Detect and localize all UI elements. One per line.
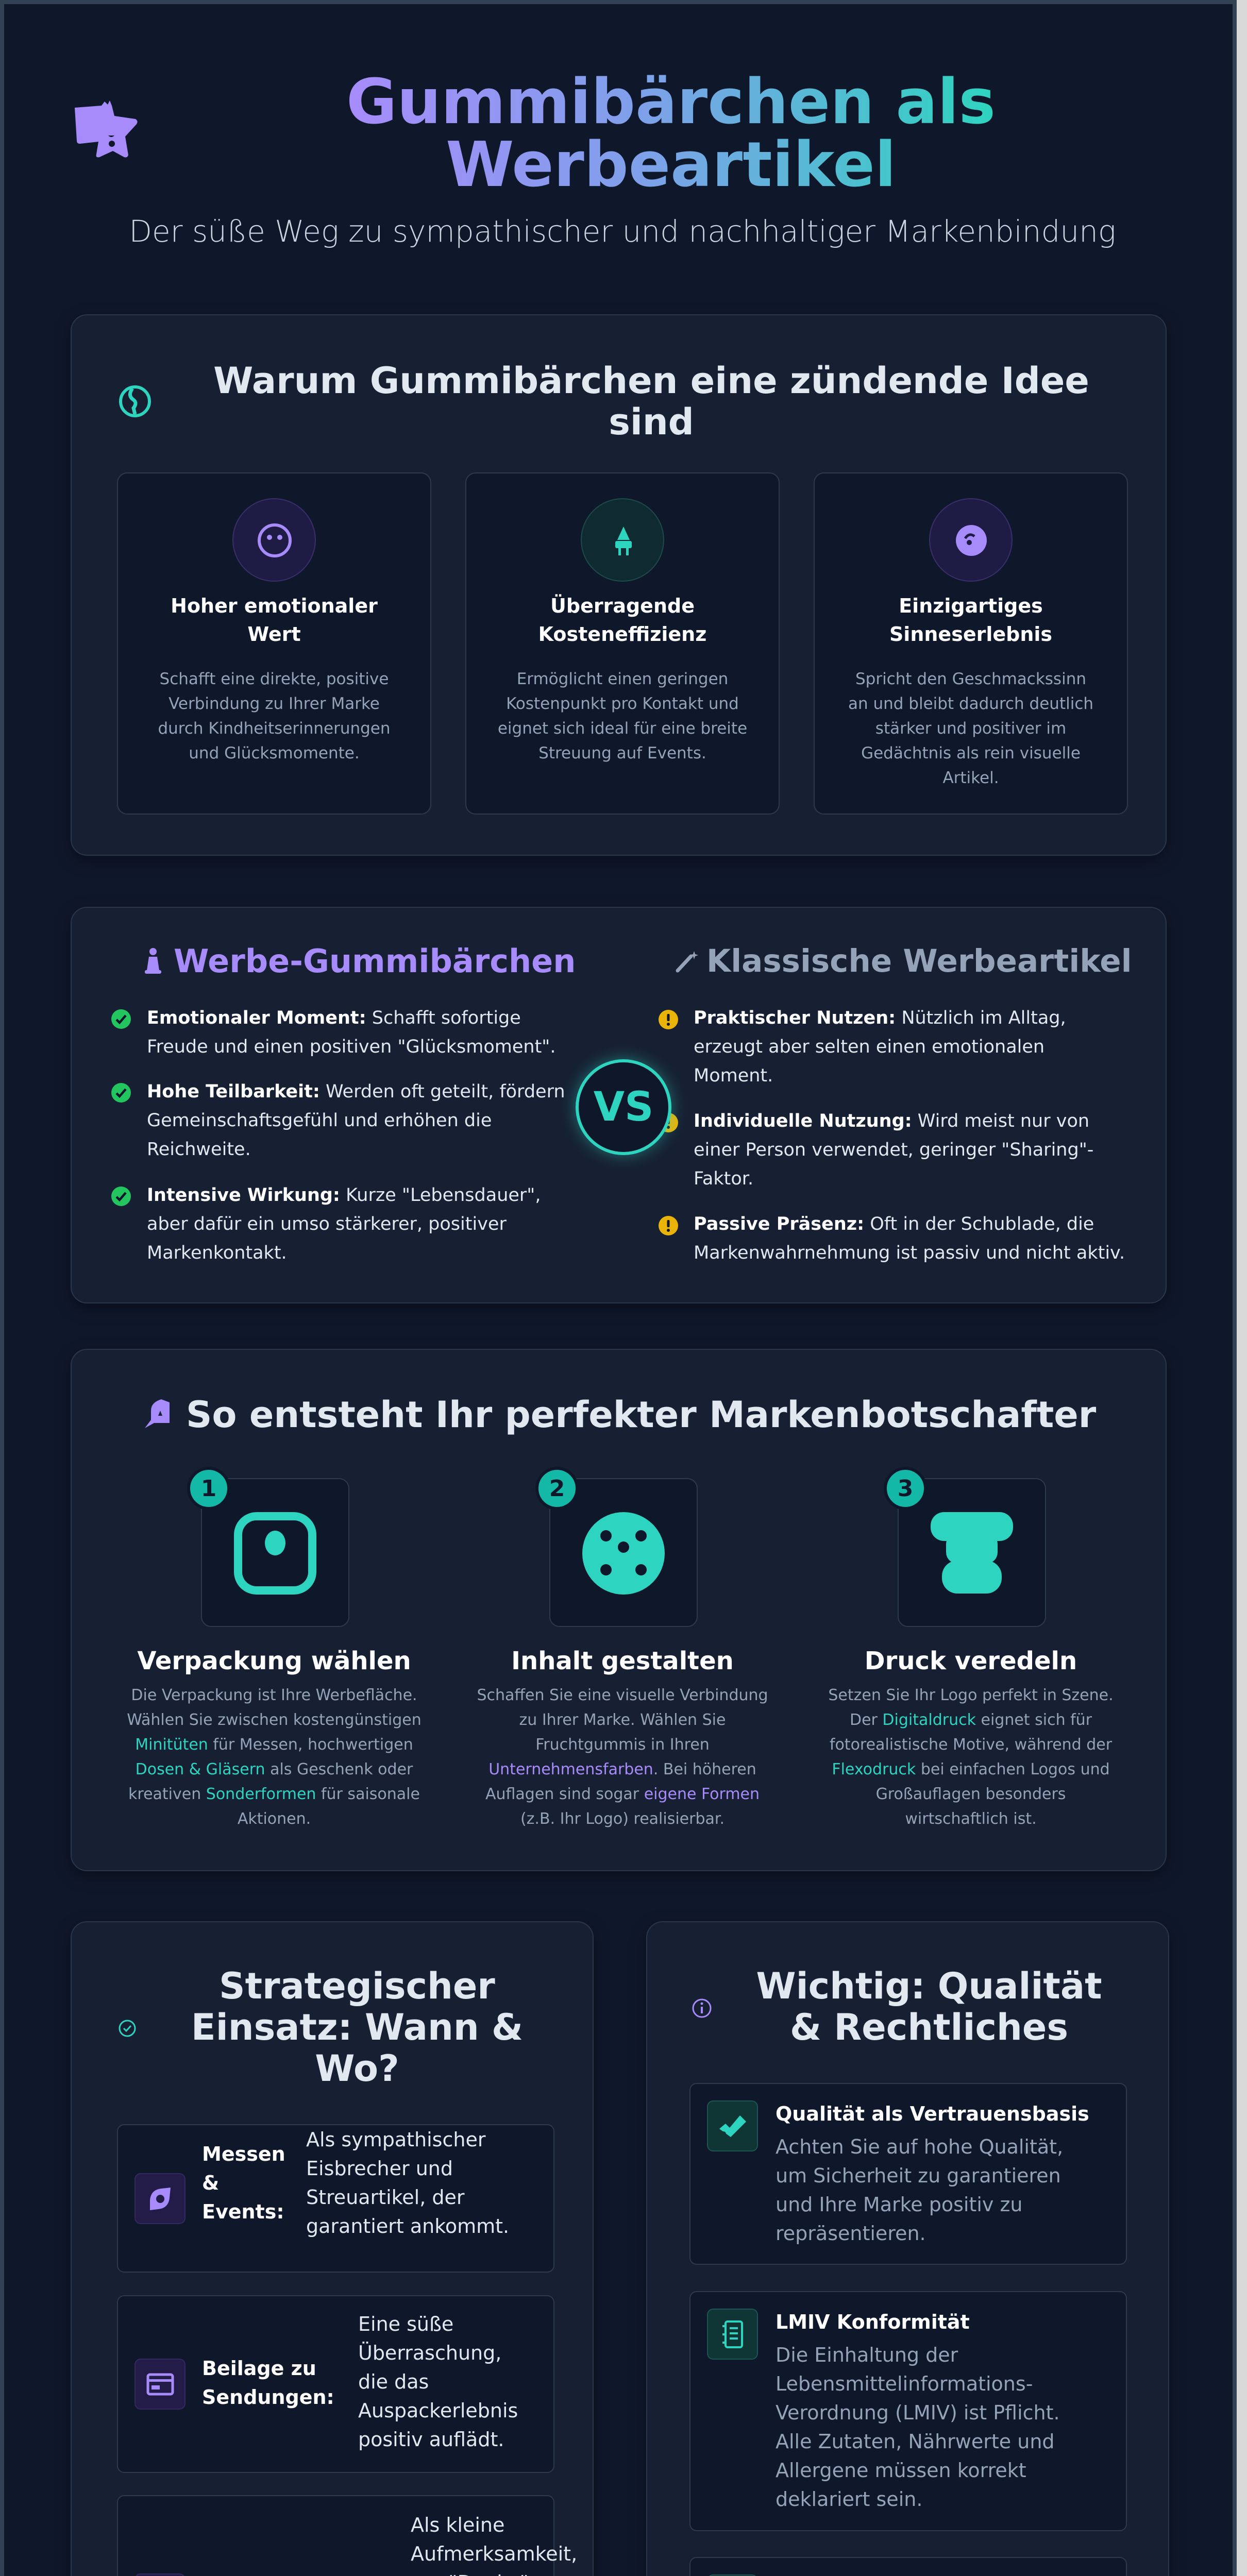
text: um Sicherheit zu garantieren bbox=[776, 2164, 1061, 2187]
badge 1 bbox=[187, 1467, 230, 1510]
list: pros: Emotionaler Moment: Schafft sofortige bbox=[147, 1008, 521, 1028]
list: pros bbox=[111, 1008, 565, 1263]
card: cost efficiency bbox=[465, 472, 780, 815]
step 1: Aktionen. bbox=[238, 1810, 311, 1828]
card: sensory experience: Artikel. bbox=[942, 769, 999, 787]
title: Gummibärchen als bbox=[346, 66, 996, 138]
list: pros: Reichweite. bbox=[147, 1139, 251, 1160]
list: cons: Moment. bbox=[694, 1065, 773, 1086]
heading: Warum Gummibärchen eine zündende Idee bbox=[213, 360, 1089, 402]
text: Alle Zutaten, Nährwerte und bbox=[776, 2430, 1055, 2453]
item: emotional moment bbox=[111, 1008, 556, 1057]
panel: process steps bbox=[71, 1349, 1167, 1871]
card: cost efficiency: Kosteneffizienz bbox=[538, 623, 706, 646]
item: trade fairs: Streuartikel, der bbox=[306, 2186, 465, 2209]
panel: why gummy bears bbox=[71, 314, 1167, 856]
item: vegan bbox=[689, 2557, 1127, 2576]
item: shipments bbox=[117, 2295, 554, 2473]
step 3: Großauflagen besonders bbox=[876, 1785, 1066, 1803]
heading: Klassische Werbeartikel: Klassische Werbeartikel bbox=[706, 943, 1132, 979]
card: cost efficiency: Überragende bbox=[550, 595, 695, 617]
item: shipments: Auspackerlebnis bbox=[358, 2399, 518, 2422]
text: Lebensmittelinformations- bbox=[776, 2372, 1033, 2395]
step 1: kreativen Sonderformen für saisonale bbox=[128, 1785, 420, 1803]
list: cons: Individuelle Nutzung: Wird meist nur von bbox=[694, 1111, 1089, 1131]
text: Qualität als Vertrauensbasis bbox=[776, 2103, 1089, 2125]
card: cost efficiency: Ermöglicht einen geringen bbox=[517, 670, 728, 688]
heading: Werbe-Gummibärchen: Werbe-Gummibärchen bbox=[174, 942, 576, 980]
subtitle: Der süße Weg zu sympathischer und nachhaltiger Markenbindung bbox=[129, 214, 1116, 249]
card: sensory experience bbox=[814, 472, 1128, 815]
card: sensory experience: Gedächtnis als rein visuelle bbox=[861, 744, 1081, 762]
card: sensory experience: an und bleibt dadurch deutlich bbox=[848, 694, 1093, 713]
heading bbox=[213, 360, 1089, 443]
item: quality bbox=[689, 2083, 1127, 2265]
heading: quality & legal: & Rechtliches bbox=[790, 2006, 1068, 2048]
step 1: Minitüten für Messen, hochwertigen bbox=[135, 1736, 413, 1754]
step 2: Unternehmensfarben. Bei höheren bbox=[488, 1760, 756, 1778]
item: intensive effect bbox=[111, 1185, 541, 1263]
list: cons: Faktor. bbox=[694, 1168, 753, 1189]
step 1: Die Verpackung ist Ihre Werbefläche. bbox=[131, 1686, 417, 1704]
list: pros: Hohe Teilbarkeit: Werden oft geteilt, fördern bbox=[147, 1081, 565, 1102]
item: shipments: Beilage zu bbox=[202, 2357, 316, 2380]
badge 2: 2 bbox=[549, 1476, 565, 1501]
step 1: Wählen Sie zwischen kostengünstigen bbox=[127, 1711, 422, 1729]
item: trade fairs bbox=[117, 2124, 554, 2273]
item: trade fairs: Als sympathischer bbox=[306, 2128, 485, 2151]
heading: quality & legal bbox=[756, 1965, 1102, 2048]
heading: So entsteht Ihr perfekter Markenbotschafter bbox=[186, 1394, 1096, 1436]
list: pros: Gemeinschaftsgefühl und erhöhen die bbox=[147, 1110, 492, 1131]
step 3: Flexodruck bei einfachen Logos und bbox=[832, 1760, 1110, 1778]
icon: smiley bbox=[232, 498, 316, 582]
text: repräsentieren. bbox=[776, 2222, 926, 2245]
item: passive presence bbox=[659, 1214, 1125, 1263]
badge 3 bbox=[884, 1467, 927, 1510]
text: Achten Sie auf hohe Qualität, bbox=[776, 2136, 1063, 2158]
badge 1: 1 bbox=[201, 1476, 216, 1501]
VS badge: VS bbox=[594, 1084, 653, 1130]
heading: strategic use bbox=[191, 1965, 523, 2090]
text: deklariert sein. bbox=[776, 2488, 922, 2511]
step 2: Auflagen sind sogar eigene Formen bbox=[485, 1785, 760, 1803]
card: emotional value: durch Kindheitserinnerungen bbox=[158, 719, 391, 738]
item: trade fairs: & bbox=[202, 2172, 219, 2194]
list: cons: erzeugt aber selten einen emotionalen bbox=[694, 1037, 1044, 1057]
text: Verordnung (LMIV) ist Pflicht. bbox=[776, 2401, 1060, 2424]
panel: strategic use bbox=[71, 1921, 594, 2576]
card: sensory experience: Spricht den Geschmackssinn bbox=[855, 670, 1086, 688]
item: shipments: die das bbox=[358, 2370, 429, 2393]
card: cost efficiency: eignet sich ideal für eine breite bbox=[498, 719, 747, 738]
step 2: (z.B. Ihr Logo) realisierbar. bbox=[520, 1810, 724, 1828]
heading: quality & legal: Wichtig: Qualität bbox=[756, 1965, 1102, 2007]
step 2: Schaffen Sie eine visuelle Verbindung bbox=[477, 1686, 768, 1704]
list: cons: Passive Präsenz: Oft in der Schublade, die bbox=[694, 1214, 1094, 1234]
badge 3: 3 bbox=[898, 1476, 913, 1501]
card: emotional value: Verbindung zu Ihrer Marke bbox=[168, 694, 380, 713]
text: Die Einhaltung der bbox=[776, 2344, 958, 2366]
list: cons: Markenwahrnehmung ist passiv und nicht aktiv. bbox=[694, 1243, 1125, 1263]
item: practical use bbox=[659, 1008, 1066, 1086]
card: sensory experience: Sinneserlebnis bbox=[889, 623, 1052, 646]
list: pros: Markenkontakt. bbox=[147, 1243, 287, 1263]
item: trade fairs: Messen bbox=[202, 2143, 285, 2165]
list: pros: aber dafür ein umso stärkerer, positiver bbox=[147, 1214, 507, 1234]
card: emotional value: Wert bbox=[247, 623, 301, 646]
step 2: zu Ihrer Marke. Wählen Sie bbox=[519, 1711, 726, 1729]
icon box: packaging bbox=[201, 1478, 349, 1627]
VS badge bbox=[576, 1059, 671, 1155]
list: pros: Intensive Wirkung: Kurze "Lebensdauer", bbox=[147, 1185, 541, 1206]
card: sensory experience: stärker und positiver im bbox=[875, 719, 1066, 738]
step 3: Der Digitaldruck eignet sich für bbox=[850, 1711, 1092, 1729]
item: shipments: Sendungen: bbox=[202, 2386, 334, 2409]
badge 2 bbox=[535, 1467, 579, 1510]
step 3: Druck veredeln bbox=[865, 1647, 1077, 1675]
text: LMIV Konformität bbox=[776, 2311, 970, 2333]
item: customer loyalty: Als kleine bbox=[411, 2514, 504, 2536]
step 1 bbox=[127, 1467, 422, 1828]
step 2: Fruchtgummis in Ihren bbox=[535, 1736, 710, 1754]
item: individual use bbox=[665, 1111, 1093, 1189]
panel: quality & legal bbox=[646, 1921, 1169, 2576]
item: shipments: Eine süße bbox=[358, 2313, 453, 2335]
item: LMIV bbox=[689, 2291, 1127, 2531]
icon: info bbox=[693, 1999, 711, 2018]
step 3: wirtschaftlich ist. bbox=[905, 1810, 1037, 1828]
card: sensory experience: Einzigartiges bbox=[899, 595, 1043, 617]
heading: sind bbox=[609, 401, 694, 443]
item: shipments: Überraschung, bbox=[358, 2342, 501, 2364]
step 2 bbox=[477, 1467, 768, 1828]
icon: check circle bbox=[119, 2020, 136, 2037]
step 1: Dosen & Gläsern als Geschenk oder bbox=[136, 1760, 413, 1778]
icon box: print bbox=[898, 1478, 1046, 1627]
item: shipments: positiv auflädt. bbox=[358, 2428, 504, 2451]
list: cons: einer Person verwendet, geringer "Sharing"- bbox=[694, 1140, 1093, 1160]
panel: comparison bbox=[71, 907, 1167, 1303]
item: shareability bbox=[111, 1081, 565, 1160]
list: cons: Praktischer Nutzen: Nützlich im Alltag, bbox=[694, 1008, 1066, 1028]
icon: logo star bbox=[75, 100, 138, 158]
heading: strategic use: Wo? bbox=[315, 2047, 399, 2090]
heading: strategic use: Strategischer bbox=[219, 1965, 495, 2007]
item: customer loyalty: Aufmerksamkeit, bbox=[411, 2543, 577, 2565]
item: trade fairs: Eisbrecher und bbox=[306, 2157, 453, 2180]
icon: globe bbox=[119, 385, 151, 417]
item: customer loyalty bbox=[117, 2495, 554, 2576]
heading: strategic use: Einsatz: Wann & bbox=[191, 2006, 523, 2048]
text: und Ihre Marke positiv zu bbox=[776, 2193, 1022, 2216]
step 1: Verpackung wählen bbox=[137, 1647, 411, 1675]
step 3: Setzen Sie Ihr Logo perfekt in Szene. bbox=[828, 1686, 1114, 1704]
item: trade fairs: Events: bbox=[202, 2200, 284, 2223]
card: emotional value bbox=[117, 472, 431, 815]
card: cost efficiency: Kostenpunkt pro Kontakt und bbox=[506, 694, 739, 713]
card: emotional value: Hoher emotionaler bbox=[171, 595, 378, 617]
item: trade fairs: garantiert ankommt. bbox=[306, 2215, 509, 2238]
list: cons bbox=[659, 1008, 1125, 1263]
card: emotional value: Schafft eine direkte, positive bbox=[160, 670, 389, 688]
list: pros: Freude und einen positiven "Glücksmoment". bbox=[147, 1037, 556, 1057]
card: cost efficiency: Streuung auf Events. bbox=[538, 744, 706, 762]
icon: plug bbox=[581, 498, 664, 582]
card: emotional value: und Glücksmomente. bbox=[189, 744, 360, 762]
title: Werbeartikel bbox=[446, 129, 896, 201]
step 2: Inhalt gestalten bbox=[511, 1647, 734, 1675]
step 3: fotorealistische Motive, während der bbox=[830, 1736, 1112, 1754]
icon box: content bbox=[549, 1478, 698, 1627]
text: Allergene müssen korrekt bbox=[776, 2459, 1026, 2482]
step 3 bbox=[828, 1467, 1114, 1828]
title bbox=[346, 66, 996, 201]
icon: taste bbox=[929, 498, 1013, 582]
